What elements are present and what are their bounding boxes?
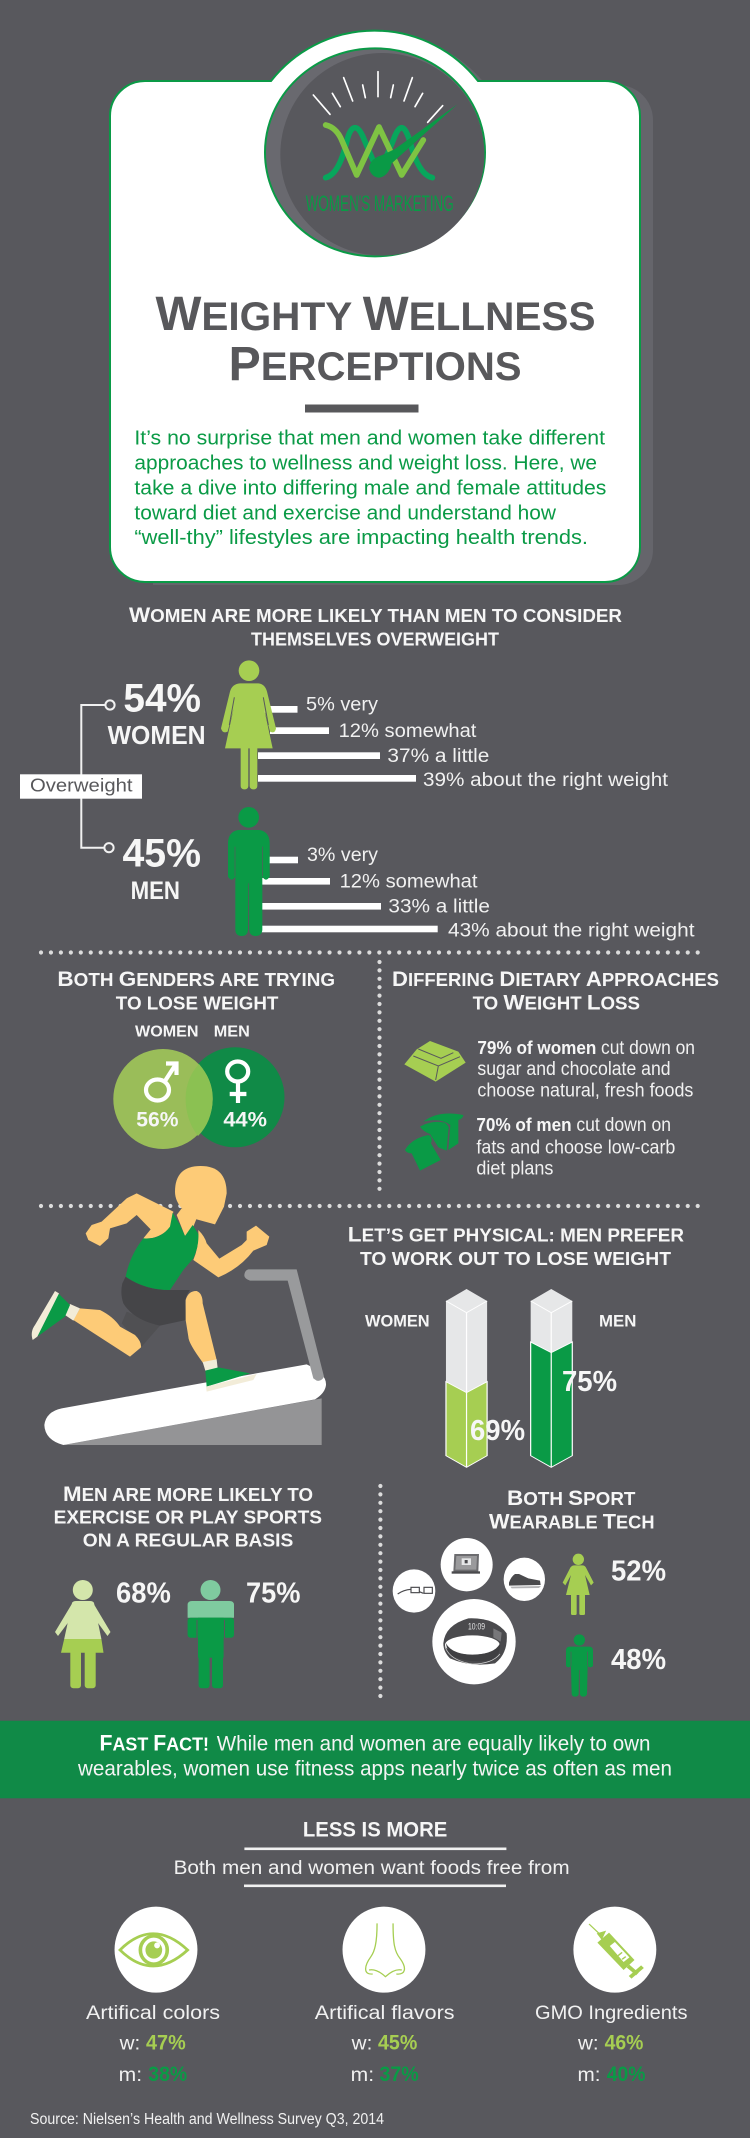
stat: 54% women: WOMEN [108,720,206,750]
chart: work out columns: 75% [562,1366,617,1398]
heading: men exercise: ON A REGULAR BASIS [83,1531,293,1551]
chart: work out columns: 69% [470,1415,525,1447]
chart: women weight perception bars: 39% about the right weight [423,770,669,791]
heading: men exercise: MEN ARE MORE LIKELY TO [63,1482,313,1506]
chart: gender venn diagram: WOMEN [135,1024,198,1041]
chart: women weight perception bars: 5% very [306,695,379,716]
column: GMO ingredients [535,1907,688,2086]
icon: nose [343,1907,425,1993]
connector: overweight bracket: Overweight [30,775,132,795]
icon: bread slices [405,1113,463,1171]
chart: men weight perception bars [261,845,695,942]
women column [446,1289,487,1467]
heading: men exercise [54,1482,322,1551]
icon: glasses [393,1569,435,1613]
icon: male symbol [146,1064,176,1100]
icon: eye [115,1907,197,1993]
stat: 54% women: 54% [123,677,201,721]
icon: chocolate bar [404,1041,466,1082]
column: GMO ingredients: 40% [607,2063,646,2086]
intro text: It’s no surprise that men and women take different [134,428,605,450]
chart: work out columns: WOMEN [365,1311,430,1330]
column: artificial flavors: m: [351,2065,374,2086]
icon: man 75% [188,1577,301,1688]
column: artificial colors: 47% [146,2031,186,2054]
chart: gender venn diagram [113,1024,284,1149]
icon: small man 48% [566,1634,666,1697]
text: men diet: 70% of men [476,1114,572,1135]
column: GMO ingredients: w: [577,2033,599,2054]
panel: header card [110,31,653,585]
text: women diet: choose natural, fresh foods [477,1081,693,1102]
text: men diet: diet plans [476,1158,553,1179]
heading: wearable tech: WEARABLE TECH [489,1509,654,1533]
chart: gender venn diagram: 44% [223,1109,267,1132]
chart: men weight perception bars: 43% about the right weight [448,921,695,942]
heading: women consider themselves overweight [129,603,622,650]
panel: fast fact banner: While men and women are equally likely to own [217,1733,650,1756]
column: artificial flavors: w: [351,2033,372,2054]
heading: wearable tech: BOTH SPORT [507,1486,635,1510]
panel: fast fact banner [0,1721,750,1798]
chart: men weight perception bars: 33% a little [388,897,490,918]
text: women diet [477,1037,695,1102]
chart: gender venn diagram: 56% [136,1109,179,1132]
icons: wearable devices: 10:09 [468,1622,485,1632]
intro text: take a dive into differing male and female attitudes [134,477,606,499]
column: GMO ingredients: 46% [605,2031,644,2054]
icon: small woman 52%: 52% [611,1556,666,1588]
panel: fast fact banner: FAST FACT! [100,1731,209,1756]
source note: Source: Nielsen’s Health and Wellness Survey Q3, 2014 [30,2111,384,2128]
column: artificial flavors: 45% [378,2031,418,2054]
heading: less is more: LESS IS MORE [303,1818,447,1842]
runner [32,1166,269,1392]
title: PERCEPTIONS [229,338,522,391]
panel: fast fact banner: wearables, women use fitness apps nearly twice as often as men [77,1758,672,1781]
column: artificial colors: m: [119,2065,142,2086]
treadmill [44,1269,326,1445]
icons: wearable devices [393,1538,545,1684]
text: women diet: cut down on [601,1038,695,1059]
heading: differing dietary approaches: TO WEIGHT LOSS [473,990,640,1014]
column: artificial colors: Artifical colors [86,2003,220,2024]
chart: women weight perception bars: 37% a little [387,746,489,767]
stat: 45% men [122,832,201,905]
heading: wearable tech [489,1486,654,1533]
logo: Women's Marketing gauge [265,48,485,256]
heading: let's get physical: TO WORK OUT TO LOSE WEIGHT [360,1249,671,1269]
heading: men exercise: EXERCISE OR PLAY SPORTS [54,1507,322,1527]
text: women diet: 79% of women [477,1037,596,1058]
column: artificial flavors [315,1907,454,2086]
stat: 45% men: MEN [131,877,180,905]
intro text: “well-thy” lifestyles are impacting health trends. [134,527,588,549]
title [156,288,596,391]
heading: let's get physical [348,1223,684,1269]
chart: work out columns [365,1289,636,1467]
heading: differing dietary approaches [392,967,719,1014]
heading: differing dietary approaches: DIFFERING DIETARY APPROACHES [392,967,719,991]
icon: syringe [573,1907,656,1993]
column: GMO ingredients: GMO Ingredients [535,2003,688,2024]
intro text: approaches to wellness and weight loss. Here, we [134,453,597,475]
text: women diet: sugar and chocolate and [477,1059,671,1080]
icon: female symbol [227,1062,248,1103]
column: artificial colors: w: [119,2033,140,2054]
icon: small woman 52% [563,1554,666,1615]
icon: woman figure [221,660,276,789]
column: artificial flavors: Artifical flavors [315,2003,454,2024]
chart: men weight perception bars: 3% very [307,845,379,866]
stat: 45% men: 45% [122,832,201,876]
connector: overweight bracket [20,700,142,852]
icon: small man 48%: 48% [611,1644,666,1676]
illustration: runner on treadmill [32,1166,326,1445]
column: artificial colors: 38% [148,2063,187,2086]
chart: gender venn diagram: MEN [214,1024,250,1041]
heading: women consider themselves overweight: THEMSELVES OVERWEIGHT [251,630,499,650]
heading: both genders trying to lose weight: TO LOSE WEIGHT [116,993,278,1013]
heading: less is more [174,1818,570,1887]
column: artificial colors [86,1907,220,2086]
heading: let's get physical: LET’S GET PHYSICAL: MEN PREFER [348,1223,684,1247]
chart: work out columns: MEN [599,1311,636,1330]
heading: less is more: Both men and women want foods free from [174,1858,570,1879]
intro text: toward diet and exercise and understand how [134,502,557,524]
icon: fitness band [432,1599,516,1684]
chart: women weight perception bars: 12% somewhat [339,721,477,742]
chart: women weight perception bars [258,695,669,791]
intro text [134,428,606,549]
text: men diet: fats and choose low-carb [476,1137,675,1158]
title: WEIGHTY WELLNESS [156,288,596,341]
icon: woman 68% [55,1577,171,1688]
chart: men weight perception bars: 12% somewhat [340,872,478,893]
text: men diet: cut down on [576,1115,671,1136]
icon: man figure [228,807,270,936]
heading: women consider themselves overweight: WOMEN ARE MORE LIKELY THAN MEN TO CONSIDER [129,603,622,627]
icon: man 75%: 75% [246,1577,301,1609]
icon: shoe [504,1558,545,1601]
logo: Women's Marketing gauge: WOMEN'S MARKETING [306,191,454,216]
text: men diet [476,1114,675,1179]
column: GMO ingredients: m: [578,2065,600,2086]
icon: tablet [441,1538,493,1591]
icon: woman 68%: 68% [116,1577,171,1609]
heading: both genders trying to lose weight: BOTH GENDERS ARE TRYING [57,967,335,991]
stat: 54% women [108,677,206,750]
heading: both genders trying to lose weight [57,967,335,1013]
column: artificial flavors: 37% [380,2063,419,2086]
men column [531,1289,572,1467]
